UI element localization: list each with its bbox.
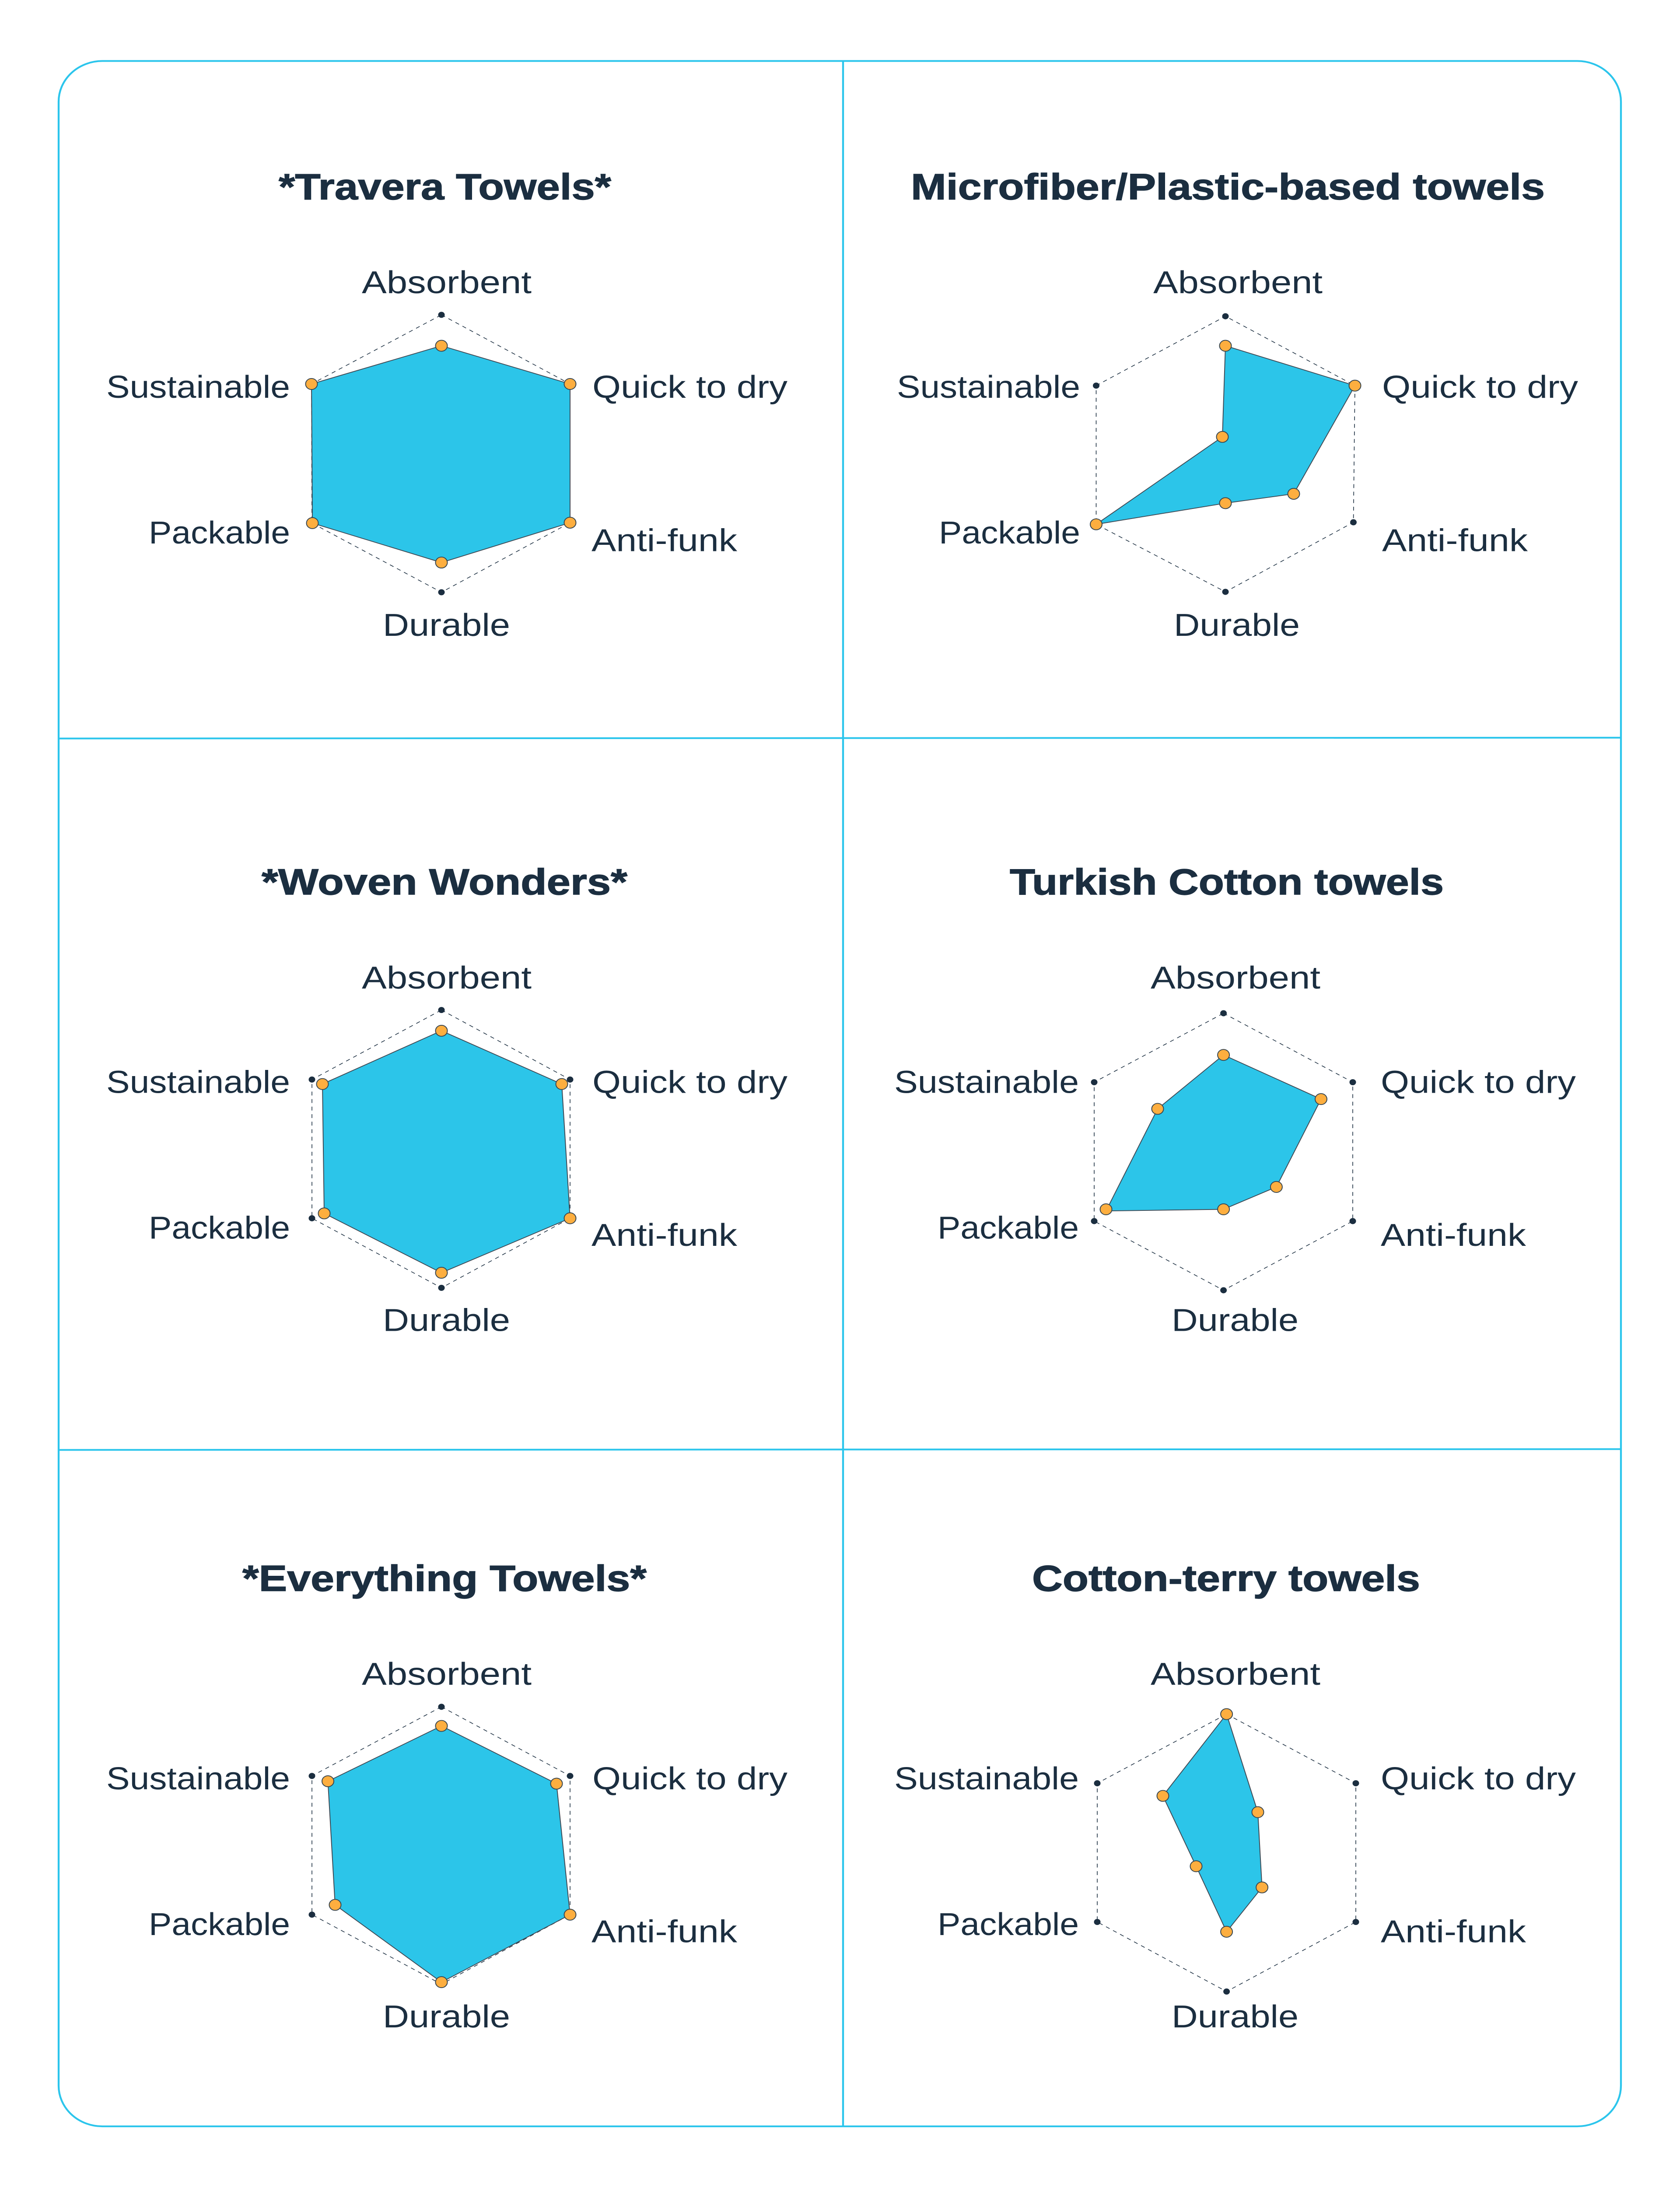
axis labels: Durable	[383, 1999, 510, 2034]
axis labels: Packable	[938, 1906, 1079, 1942]
axis labels: Anti-funk	[1381, 1217, 1526, 1253]
radar grid	[309, 1704, 573, 1984]
axis labels	[106, 265, 788, 642]
axis labels: Durable	[1172, 1999, 1298, 2034]
axis labels	[106, 1656, 788, 2034]
axis labels: Anti-funk	[592, 522, 737, 558]
data polygon	[1106, 1055, 1321, 1211]
axis labels: Anti-funk	[592, 1914, 737, 1949]
axis labels: Anti-funk	[592, 1217, 737, 1253]
title: Microfiber/Plastic-based towels	[911, 166, 1545, 207]
axis labels	[894, 1656, 1576, 2034]
title: *Travera Towels*	[279, 166, 611, 207]
data points	[322, 1720, 576, 1988]
axis labels: Durable	[1172, 1302, 1298, 1338]
data points	[1157, 1709, 1268, 1937]
axis labels: Quick to dry	[592, 1761, 788, 1796]
axis labels: Sustainable	[894, 1761, 1079, 1796]
radar grid	[1091, 1010, 1356, 1293]
data points	[1100, 1049, 1327, 1215]
axis labels: Quick to dry	[1381, 1064, 1576, 1100]
title: *Everything Towels*	[242, 1558, 647, 1599]
radar grid	[1093, 313, 1357, 595]
axis labels: Durable	[383, 607, 510, 642]
panel: Travera Towels	[106, 166, 788, 642]
data polygon	[1163, 1714, 1262, 1932]
axis labels: Absorbent	[362, 960, 532, 995]
axis labels: Packable	[939, 515, 1080, 550]
axis labels: Absorbent	[1153, 265, 1323, 300]
radar grid	[1094, 1714, 1359, 1995]
axis labels: Packable	[149, 515, 290, 550]
axis labels: Quick to dry	[592, 369, 788, 404]
axis labels: Anti-funk	[1382, 522, 1528, 558]
axis labels	[897, 265, 1578, 642]
radar grid	[309, 1007, 573, 1291]
radar grid	[312, 312, 570, 595]
axis labels: Packable	[938, 1210, 1079, 1245]
axis labels: Absorbent	[1151, 1656, 1320, 1692]
axis labels: Sustainable	[106, 1064, 290, 1100]
axis labels	[106, 960, 788, 1338]
data polygon	[322, 1031, 570, 1273]
panel: Microfiber/Plastic-based towels	[897, 166, 1578, 642]
data polygon	[312, 346, 570, 563]
panel: Woven Wonders	[106, 862, 788, 1338]
data polygon	[328, 1726, 570, 1982]
axis labels: Durable	[1174, 607, 1300, 642]
axis labels: Absorbent	[1151, 960, 1320, 995]
axis labels: Anti-funk	[1381, 1914, 1526, 1949]
data points	[317, 1025, 576, 1278]
axis labels: Durable	[383, 1302, 510, 1338]
axis labels: Sustainable	[106, 1761, 290, 1796]
axis labels: Absorbent	[362, 265, 532, 300]
axis labels: Absorbent	[362, 1656, 532, 1692]
axis labels: Sustainable	[106, 369, 290, 404]
data points	[305, 340, 576, 568]
panel: Cotton-terry towels	[894, 1558, 1576, 2034]
panel: Everything Towels	[106, 1558, 788, 2034]
axis labels	[894, 960, 1576, 1338]
axis labels: Quick to dry	[592, 1064, 788, 1100]
axis labels: Sustainable	[897, 369, 1080, 404]
title: Cotton-terry towels	[1032, 1558, 1420, 1599]
axis labels: Packable	[149, 1906, 290, 1942]
title: *Woven Wonders*	[262, 862, 627, 902]
panel: Turkish Cotton towels	[894, 862, 1576, 1338]
axis labels: Quick to dry	[1382, 369, 1578, 404]
axis labels: Packable	[149, 1210, 290, 1245]
title: Turkish Cotton towels	[1010, 862, 1444, 902]
data polygon	[1096, 346, 1355, 524]
axis labels: Quick to dry	[1381, 1761, 1576, 1796]
data points	[1090, 340, 1361, 530]
axis labels: Sustainable	[894, 1064, 1079, 1100]
